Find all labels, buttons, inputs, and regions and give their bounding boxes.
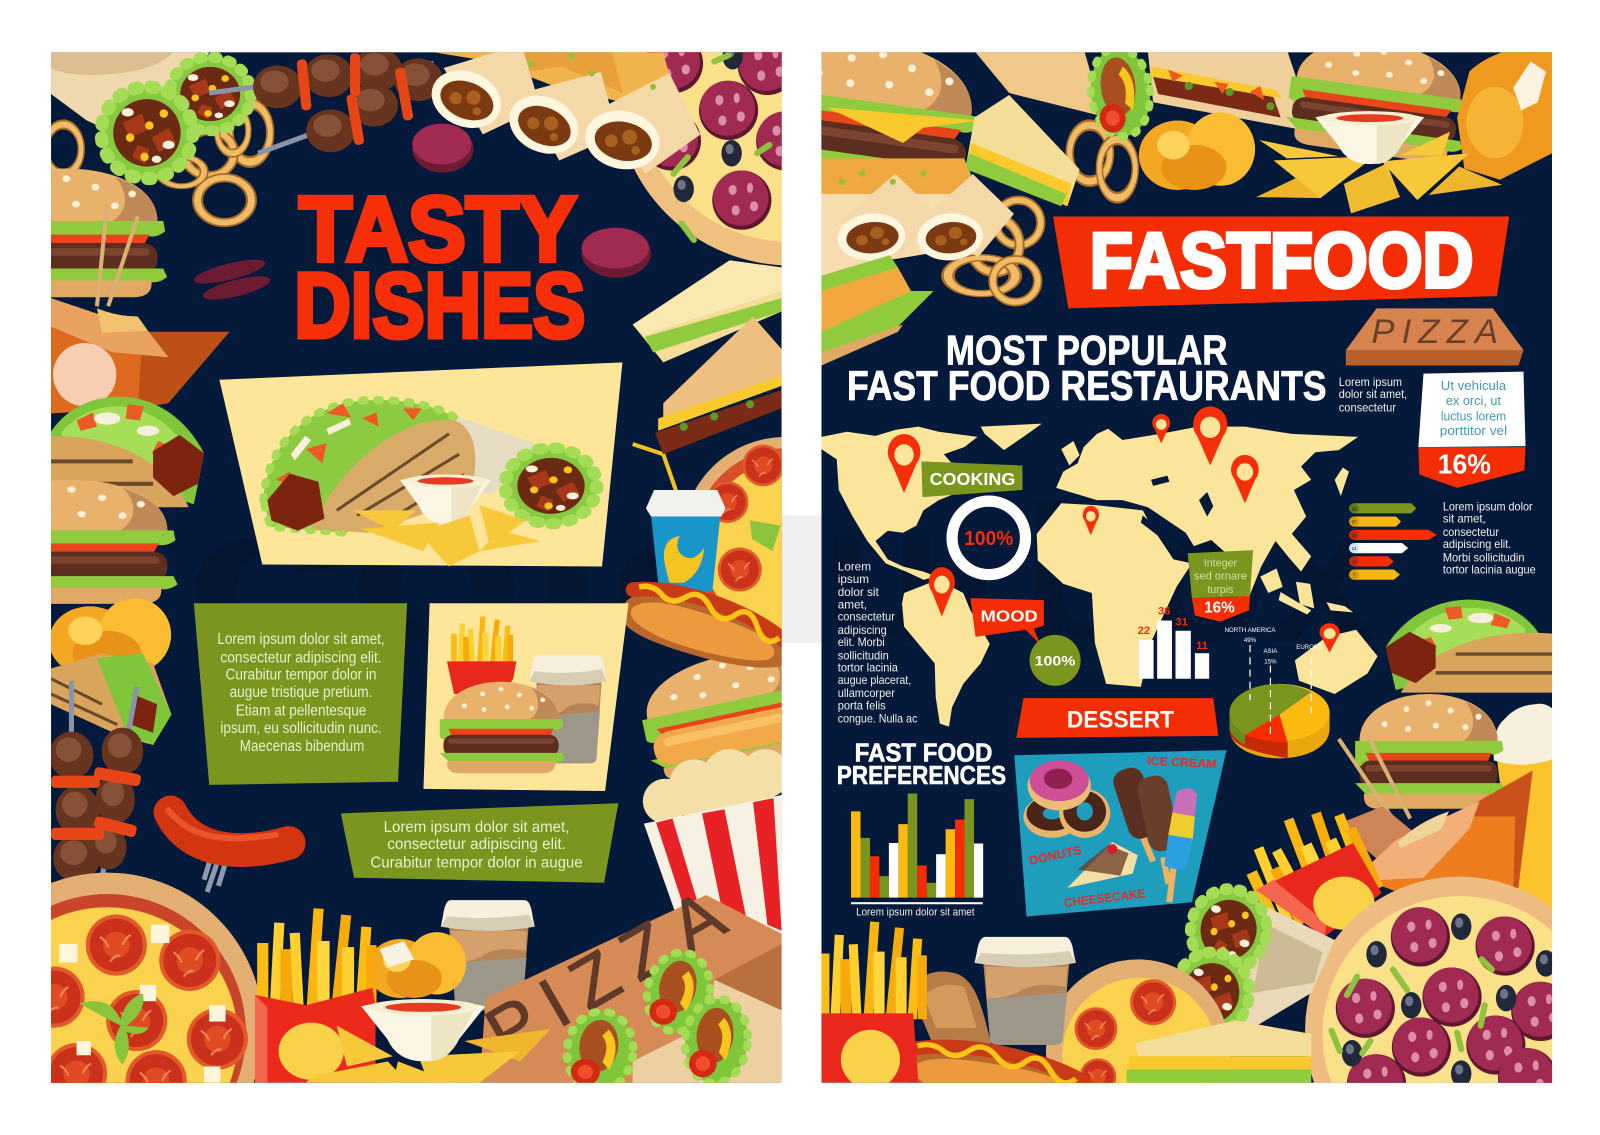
icon: burger right [642, 656, 782, 779]
icon: sandwich bottom [1127, 1021, 1311, 1083]
icon: burger left middle [51, 480, 178, 604]
icon: soda cup [633, 444, 726, 592]
panel: green text block upper: ipsum, eu sollicitudin nunc. [220, 720, 382, 737]
icon: sandwich upper right [633, 260, 782, 362]
text block: map right: sit amet, [1443, 513, 1486, 526]
chart: white bars with values [1138, 605, 1209, 679]
panel: green text block lower: consectetur adipiscing elit. [387, 836, 566, 853]
icon: fries bottom left [819, 921, 927, 1089]
chart: arrow bars: 31 [1352, 533, 1357, 538]
icon: map pins [888, 406, 1340, 653]
panel: green text block upper: augue tristique pretium. [230, 684, 372, 701]
icon: burger right side [1339, 694, 1505, 827]
icon: noodle box left [51, 298, 230, 413]
chart: pie with labels: NORTH AMERICA [1225, 627, 1276, 634]
text block: map left: porta felis [838, 699, 886, 712]
chart: 100 percent ring [952, 501, 1026, 575]
heading: fast food preferences [837, 739, 1006, 790]
icon: burritos top left [51, 52, 251, 179]
text block: map left [838, 561, 917, 726]
callout: 16 percent ribbon [1418, 372, 1526, 488]
chart: 100 percent circle: 100% [1035, 653, 1076, 669]
text block: map left: ullamcorper [838, 687, 895, 700]
icon: noodle box right [1337, 771, 1533, 903]
icon: chocolate donuts [1023, 789, 1110, 838]
icon: nuggets top [1139, 112, 1255, 190]
panel: burger combo illustration [423, 603, 629, 791]
icon: taco right [1386, 600, 1576, 693]
chart: world map [821, 424, 1378, 727]
icon: pepperoni pizza top right [620, 52, 782, 266]
text block: map right [1443, 500, 1536, 577]
panel: green text block upper: consectetur adipiscing elit. [220, 649, 382, 666]
icon: chicken top right [1457, 48, 1552, 180]
icon: sauce cup top [1315, 111, 1424, 164]
chart: preferences bar chart [851, 794, 983, 918]
heading: most popular fast food restaurants [847, 326, 1327, 409]
icon: burger top left [763, 29, 990, 204]
chart: arrow bars: 7 [1353, 573, 1356, 578]
icon: coffee cup bottom [441, 900, 535, 1010]
panel: right poster, fastfood [763, 29, 1600, 1135]
label: mood speech bubble [970, 598, 1044, 645]
text block: map left: sollicitudin [838, 649, 889, 662]
icon: coffee small [530, 655, 607, 763]
text block: map left: elit. Morbi [838, 636, 885, 649]
heading: most popular fast food restaurants: MOST POPULAR [946, 326, 1228, 373]
chart: 100 percent ring: 100% [964, 528, 1013, 550]
icon: hot dog bottom [900, 1043, 1094, 1112]
icon: wraps bottom [1167, 883, 1335, 1040]
icon: rainbow ice cream [1164, 788, 1197, 902]
labels: dessert names: CHEESECAKE [1063, 886, 1146, 910]
icon: rolled wraps left [821, 158, 1018, 286]
panel: green text block upper: Curabitur tempor dolor in [226, 667, 377, 684]
text block: map left: augue placerat, [838, 674, 911, 687]
icon: nachos bottom [306, 1026, 551, 1083]
callout: 16 percent ribbon: ex orci, ut [1446, 393, 1501, 408]
text block: map left: amet, [838, 598, 867, 611]
callout: integer 16 percent ribbon [1188, 550, 1253, 622]
panel: green text block lower: Curabitur tempor dolor in augue [370, 855, 583, 872]
icon: pepperoni pizza bottom right [1305, 877, 1600, 1135]
callout: integer 16 percent ribbon: sed ornare [1194, 571, 1247, 583]
callout: integer 16 percent ribbon: Integer [1204, 557, 1238, 569]
icon: hot dog [624, 582, 782, 668]
icon: cheesecake [1067, 842, 1138, 888]
heading: tasty dishes: DISHES [294, 255, 585, 357]
icon: sausage slices [192, 124, 651, 304]
heading: tasty dishes [297, 194, 584, 340]
heading: dessert banner [1016, 698, 1218, 738]
icon: lettuce wrap end top [1086, 45, 1154, 139]
icon: fries bottom [255, 908, 377, 1083]
icon: tomato pizza bottom left [51, 872, 258, 1083]
callout: 16 percent ribbon: Ut vehicula [1441, 378, 1507, 393]
callout: integer 16 percent ribbon: turpis [1207, 584, 1234, 596]
icon: flat taco top [1148, 52, 1311, 129]
icon: sandwich lower right [655, 316, 782, 454]
chart: pie with labels: ASIA [1263, 648, 1278, 655]
callout: 16 percent ribbon: luctus lorem [1441, 409, 1506, 424]
labels: dessert names: DONUTS [1028, 843, 1083, 868]
icon: burger left top [51, 168, 168, 307]
text block: map left: Lorem [838, 561, 871, 574]
heading: fast food preferences: PREFERENCES [837, 762, 1006, 790]
icon: rolled wraps top [432, 52, 700, 174]
icon: pizza box bottom: PIZZA [473, 874, 738, 1074]
panel: green text block upper: Lorem ipsum dolor sit amet, [217, 631, 385, 648]
heading: fast food preferences: FAST FOOD [855, 739, 992, 767]
panel: green text block lower: Lorem ipsum dolor sit amet, [384, 819, 569, 836]
text block: map right: Morbi sollicitudin [1443, 551, 1524, 564]
icon: onion rings top [948, 125, 1135, 302]
icon: fries right [1233, 795, 1384, 937]
text block: map left: ipsum [838, 573, 869, 586]
watermark: urbox [821, 466, 1378, 683]
icon: nuggets bottom [367, 932, 466, 998]
text block: top note: consectetur [1339, 401, 1396, 414]
text block: map right: consectetur [1443, 526, 1499, 539]
icon: kebab skewers top [209, 48, 443, 153]
icon: pizza box small: PIZZA [1371, 313, 1498, 351]
panel: green text block upper [194, 603, 407, 785]
icon: coffee cup right [974, 937, 1076, 1045]
watermark gap strip [782, 515, 821, 643]
icon: chicken leg [913, 971, 992, 1046]
icon: kebab skewer vertical [49, 681, 143, 888]
panel: green text block upper: Etiam at pellentesque [236, 702, 366, 719]
text block: top note [1339, 376, 1407, 414]
callout: 16 percent ribbon: 16% [1438, 449, 1491, 480]
icon: pink donut [1028, 760, 1091, 810]
callout: integer 16 percent ribbon: 16% [1204, 599, 1235, 616]
panel: main dish illustration [219, 362, 622, 566]
chart: arrow bars: 15 [1352, 506, 1357, 511]
icon: burger bun left [821, 255, 934, 365]
icon: pizza box small [1346, 308, 1523, 365]
icon: onion rings [45, 104, 270, 223]
labels: dessert names: ICE CREAM [1147, 754, 1217, 771]
chart: arrow bars: 24 [1352, 546, 1357, 551]
chart: pie with labels [1225, 627, 1330, 758]
text block: map right: Lorem ipsum dolor [1443, 500, 1533, 513]
label: cooking [921, 461, 1022, 497]
icon: tomato pizza bottom [1046, 959, 1230, 1135]
icon: taco left [51, 396, 204, 508]
panel: green text block upper: Maecenas bibendum [240, 738, 364, 755]
heading: dessert banner: DESSERT [1067, 707, 1174, 734]
icon: wrap top [976, 52, 1103, 116]
icon: tomato pizza right [695, 437, 782, 645]
callout: 16 percent ribbon: porttitor vel [1440, 423, 1507, 438]
icon: sauce cup bottom [361, 999, 485, 1061]
text block: top note: Lorem ipsum [1339, 376, 1402, 389]
labels: dessert names [1028, 754, 1217, 910]
panel: green text block lower [341, 803, 618, 883]
panel: left poster, tasty dishes [51, 52, 782, 1083]
label: mood speech bubble: MOOD [981, 609, 1038, 626]
text block: map left: tortor lacinia [838, 662, 898, 675]
text block: map right: adipiscing elit. [1443, 538, 1511, 551]
chart: preferences bar chart: Lorem ipsum dolor sit amet [856, 906, 975, 918]
text block: map left: congue. Nulla ac [838, 713, 917, 726]
text block: map right: tortor lacinia augue [1443, 564, 1536, 577]
icon: burger small [440, 682, 565, 773]
text block: map left: consectetur [838, 611, 895, 624]
chart: arrow bars [1349, 503, 1437, 580]
text block: map left: adipiscing [838, 624, 887, 637]
chart: white bars with values: 11 [1196, 640, 1208, 652]
heading: tasty dishes: TASTY [299, 178, 577, 280]
chart: white bars with values: 31 [1175, 617, 1188, 629]
label: cooking: COOKING [930, 469, 1015, 489]
chart: arrow bars: 07 [1352, 520, 1357, 525]
chart: pie with labels: 15% [1264, 658, 1277, 665]
heading: fastfood banner: FASTFOOD [1090, 218, 1473, 304]
icon: tomato wraps bottom [562, 946, 782, 1095]
chart: white bars with values: 22 [1138, 625, 1150, 637]
chart: pie with labels: 49% [1244, 637, 1257, 644]
watermark: colo [184, 466, 786, 683]
chart: arrow bars: 16 [1352, 559, 1357, 564]
text block: map left: dolor sit [838, 586, 880, 599]
icon: sausage on fork [168, 810, 289, 892]
icon: beer glass [1494, 704, 1552, 908]
icon: fries small [447, 616, 516, 694]
icon: burger top right [1282, 31, 1475, 166]
icon: taco left lower [51, 653, 171, 745]
icon: chocolate ice creams [1110, 765, 1181, 884]
icon: nachos top [1256, 132, 1502, 213]
chart: pie with labels: EUROPE [1296, 644, 1322, 651]
panel: dessert card [1014, 750, 1227, 916]
heading: most popular fast food restaurants: FAST FOOD RESTAURANTS [847, 362, 1327, 409]
icon: nuggets left [51, 598, 172, 666]
chart: white bars with values: 36 [1158, 605, 1171, 617]
chart: 100 percent circle [1030, 635, 1081, 686]
icon: popcorn box [643, 749, 790, 934]
icon: sandwich top [964, 95, 1080, 206]
text block: top note: dolor sit amet, [1339, 388, 1407, 401]
